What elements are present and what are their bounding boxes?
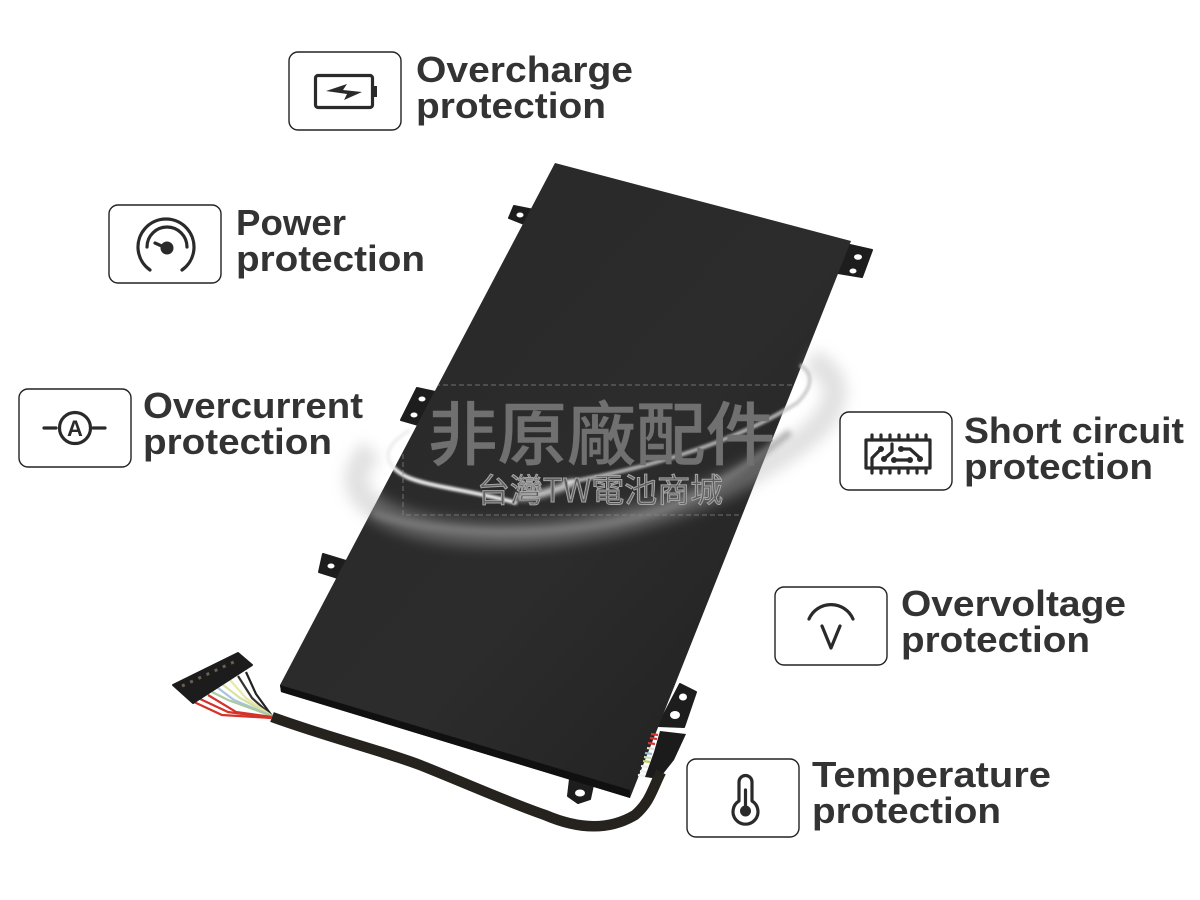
icon: gauge <box>138 219 194 270</box>
icon: ammeter <box>44 412 105 444</box>
card <box>19 389 131 467</box>
watermark subtitle: 台灣TW電池商城 <box>477 464 723 512</box>
swirl <box>356 360 835 534</box>
wires <box>194 672 272 718</box>
label: protection <box>236 238 425 279</box>
label: Power <box>236 202 346 243</box>
feature: short circuit <box>840 410 1184 490</box>
card <box>687 759 799 837</box>
label: Temperature <box>812 754 1051 795</box>
icon: circuit chip <box>866 435 930 473</box>
icon: ammeter: A <box>67 416 83 441</box>
card <box>109 205 221 283</box>
cable <box>272 717 661 826</box>
label: Overcurrent <box>143 385 363 426</box>
card <box>775 587 887 665</box>
feature: power <box>109 202 425 283</box>
label: protection <box>901 619 1090 660</box>
connector <box>173 653 252 703</box>
battery product <box>173 163 872 826</box>
watermark title: 非原廠配件 <box>428 379 775 479</box>
feature: overcurrent <box>19 385 363 467</box>
feature: overcharge <box>289 49 633 130</box>
label: protection <box>964 446 1153 487</box>
card <box>840 412 952 490</box>
label: Overcharge <box>416 49 633 90</box>
cable cover <box>645 731 686 779</box>
label: Short circuit <box>964 410 1184 451</box>
icon: voltmeter <box>809 605 853 648</box>
label: protection <box>812 790 1001 831</box>
cable exit wires <box>638 734 658 776</box>
watermark frame <box>403 385 798 515</box>
tab holes <box>328 212 862 796</box>
mounting tabs <box>319 206 872 803</box>
icon: thermometer <box>733 776 758 824</box>
label: protection <box>416 85 606 126</box>
card <box>289 52 401 130</box>
label: protection <box>143 421 332 462</box>
battery body <box>280 163 851 798</box>
battery lower bevel <box>280 685 630 798</box>
label: Overvoltage <box>901 583 1126 624</box>
feature: overvoltage <box>775 583 1126 665</box>
icon: battery <box>316 76 377 108</box>
feature: temperature <box>687 754 1051 837</box>
